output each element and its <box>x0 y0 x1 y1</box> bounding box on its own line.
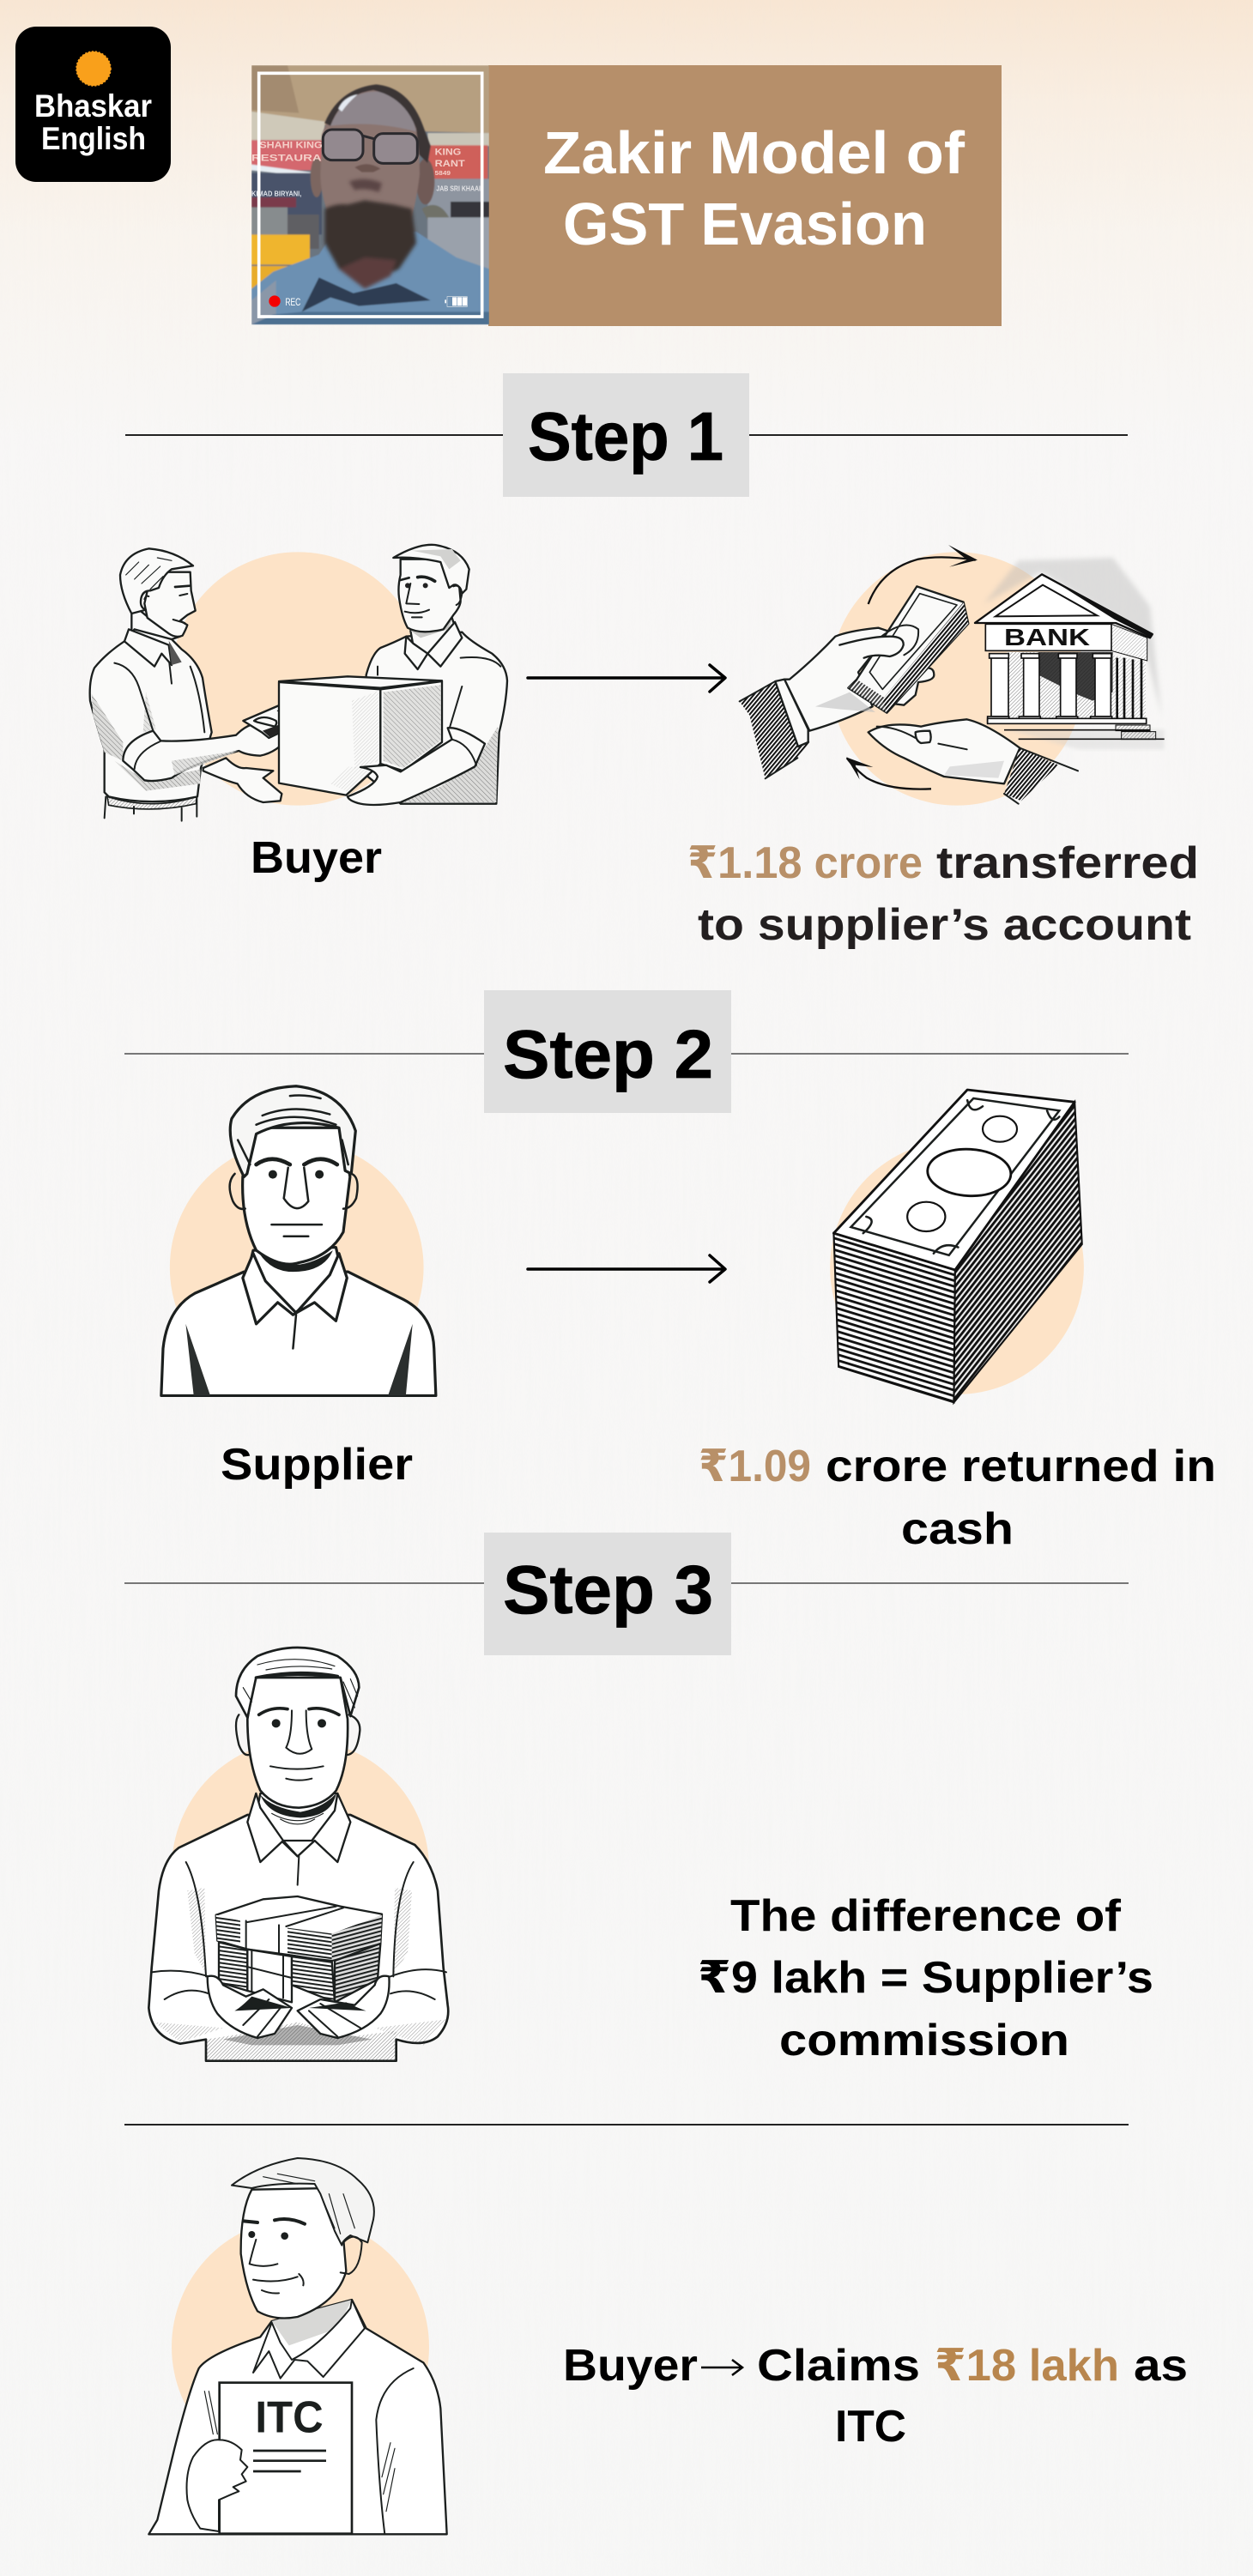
head <box>311 84 434 221</box>
illustration: cash transfer through bank <box>740 545 1165 806</box>
photo sign text: SHAHI KING <box>259 141 323 151</box>
caption: cash returned: ₹1.09 <box>699 1442 811 1491</box>
step 3 divider <box>124 1533 1129 1655</box>
banner title: Zakir Model of <box>543 119 965 186</box>
logo: Bhaskar English <box>15 27 171 182</box>
caption: commission difference: ₹9 lakh = Supplier’s <box>698 1953 1153 2003</box>
arrow: buyer to bank transfer <box>528 665 725 692</box>
caption: buyer claims ITC: ₹18 lakh <box>935 2341 1119 2391</box>
banded cash bundles <box>216 1896 382 2002</box>
header banner <box>251 65 1002 326</box>
arrow: top curved <box>869 545 978 604</box>
label: Supplier: Supplier <box>221 1440 413 1490</box>
caption: commission difference: commission <box>779 2016 1069 2065</box>
heading: Step 1: Step 1 <box>528 398 723 475</box>
battery indicator <box>445 297 467 306</box>
bank building <box>975 558 1165 749</box>
icon: orange sun <box>76 51 111 86</box>
caption: transfer to supplier: to supplier’s account <box>698 900 1191 950</box>
illustration: stack of cash <box>830 1090 1084 1402</box>
bank sign: BANK <box>1004 624 1090 650</box>
photo sign text: 5849 <box>435 169 451 177</box>
arrow: supplier to cash <box>528 1255 725 1282</box>
step 1 divider <box>125 373 1128 497</box>
caption: transfer to supplier <box>687 838 1199 950</box>
logo word: Bhaskar: Bhaskar <box>34 88 152 124</box>
ITC document <box>220 2383 352 2534</box>
step 2 divider <box>124 990 1129 1113</box>
REC indicator: REC <box>285 296 301 308</box>
caption: buyer claims ITC: Buyer <box>563 2341 698 2391</box>
caption: cash returned <box>699 1442 1216 1554</box>
caption: transfer to supplier: ₹1.18 crore <box>687 838 923 888</box>
document title: ITC: ITC <box>255 2392 324 2442</box>
heading: Step 3: Step 3 <box>503 1551 713 1628</box>
arrow: bottom curved <box>846 757 931 789</box>
cupped hands <box>208 1976 390 2038</box>
banner brown panel <box>488 65 1002 326</box>
caption: buyer claims ITC: as <box>1134 2341 1188 2391</box>
caption: commission difference: The difference of <box>730 1891 1122 1941</box>
caption: buyer claims ITC: ITC <box>835 2402 906 2452</box>
section divider <box>124 2124 1129 2126</box>
logo word: English: English <box>41 121 146 156</box>
heading: Step 2: Step 2 <box>503 1016 713 1092</box>
right man <box>366 545 507 804</box>
banner title <box>543 119 965 257</box>
banner title: GST Evasion <box>563 190 927 257</box>
illustration: supplier holding commission cash <box>148 1648 448 2061</box>
photo sign text: KIMAD BIRYANI, <box>251 189 301 197</box>
photo sign text: JAB SRI KHAAI <box>436 184 481 193</box>
illustration: buyer handing cash to supplier for a box <box>90 545 507 821</box>
label: Buyer: Buyer <box>251 833 382 883</box>
caption: commission difference <box>698 1891 1153 2065</box>
caption: buyer claims ITC: Claims <box>757 2341 920 2391</box>
caption: cash returned: cash <box>901 1504 1014 1554</box>
arrow in caption <box>701 2360 742 2375</box>
photo of Zakir in recording frame <box>251 65 489 324</box>
photo sign text: RANT <box>435 159 465 169</box>
hand with banknotes <box>740 586 968 778</box>
REC indicator <box>269 295 301 308</box>
left man <box>90 548 300 821</box>
caption: buyer claims ITC <box>563 2341 1188 2452</box>
caption: cash returned: crore returned in <box>826 1442 1216 1491</box>
caption: transfer to supplier: transferred <box>936 838 1199 888</box>
illustration: supplier portrait <box>161 1086 436 1395</box>
photo sign text: KING <box>435 148 461 158</box>
recording frame <box>259 73 482 317</box>
illustration: buyer holding ITC document <box>148 2158 447 2534</box>
photo sign text: RESTAURA <box>251 153 322 163</box>
right man arm <box>348 727 498 805</box>
photo sign text <box>251 141 481 197</box>
open receiving hand <box>869 719 1078 804</box>
cardboard box <box>279 676 442 795</box>
hand holding document <box>186 2440 247 2531</box>
